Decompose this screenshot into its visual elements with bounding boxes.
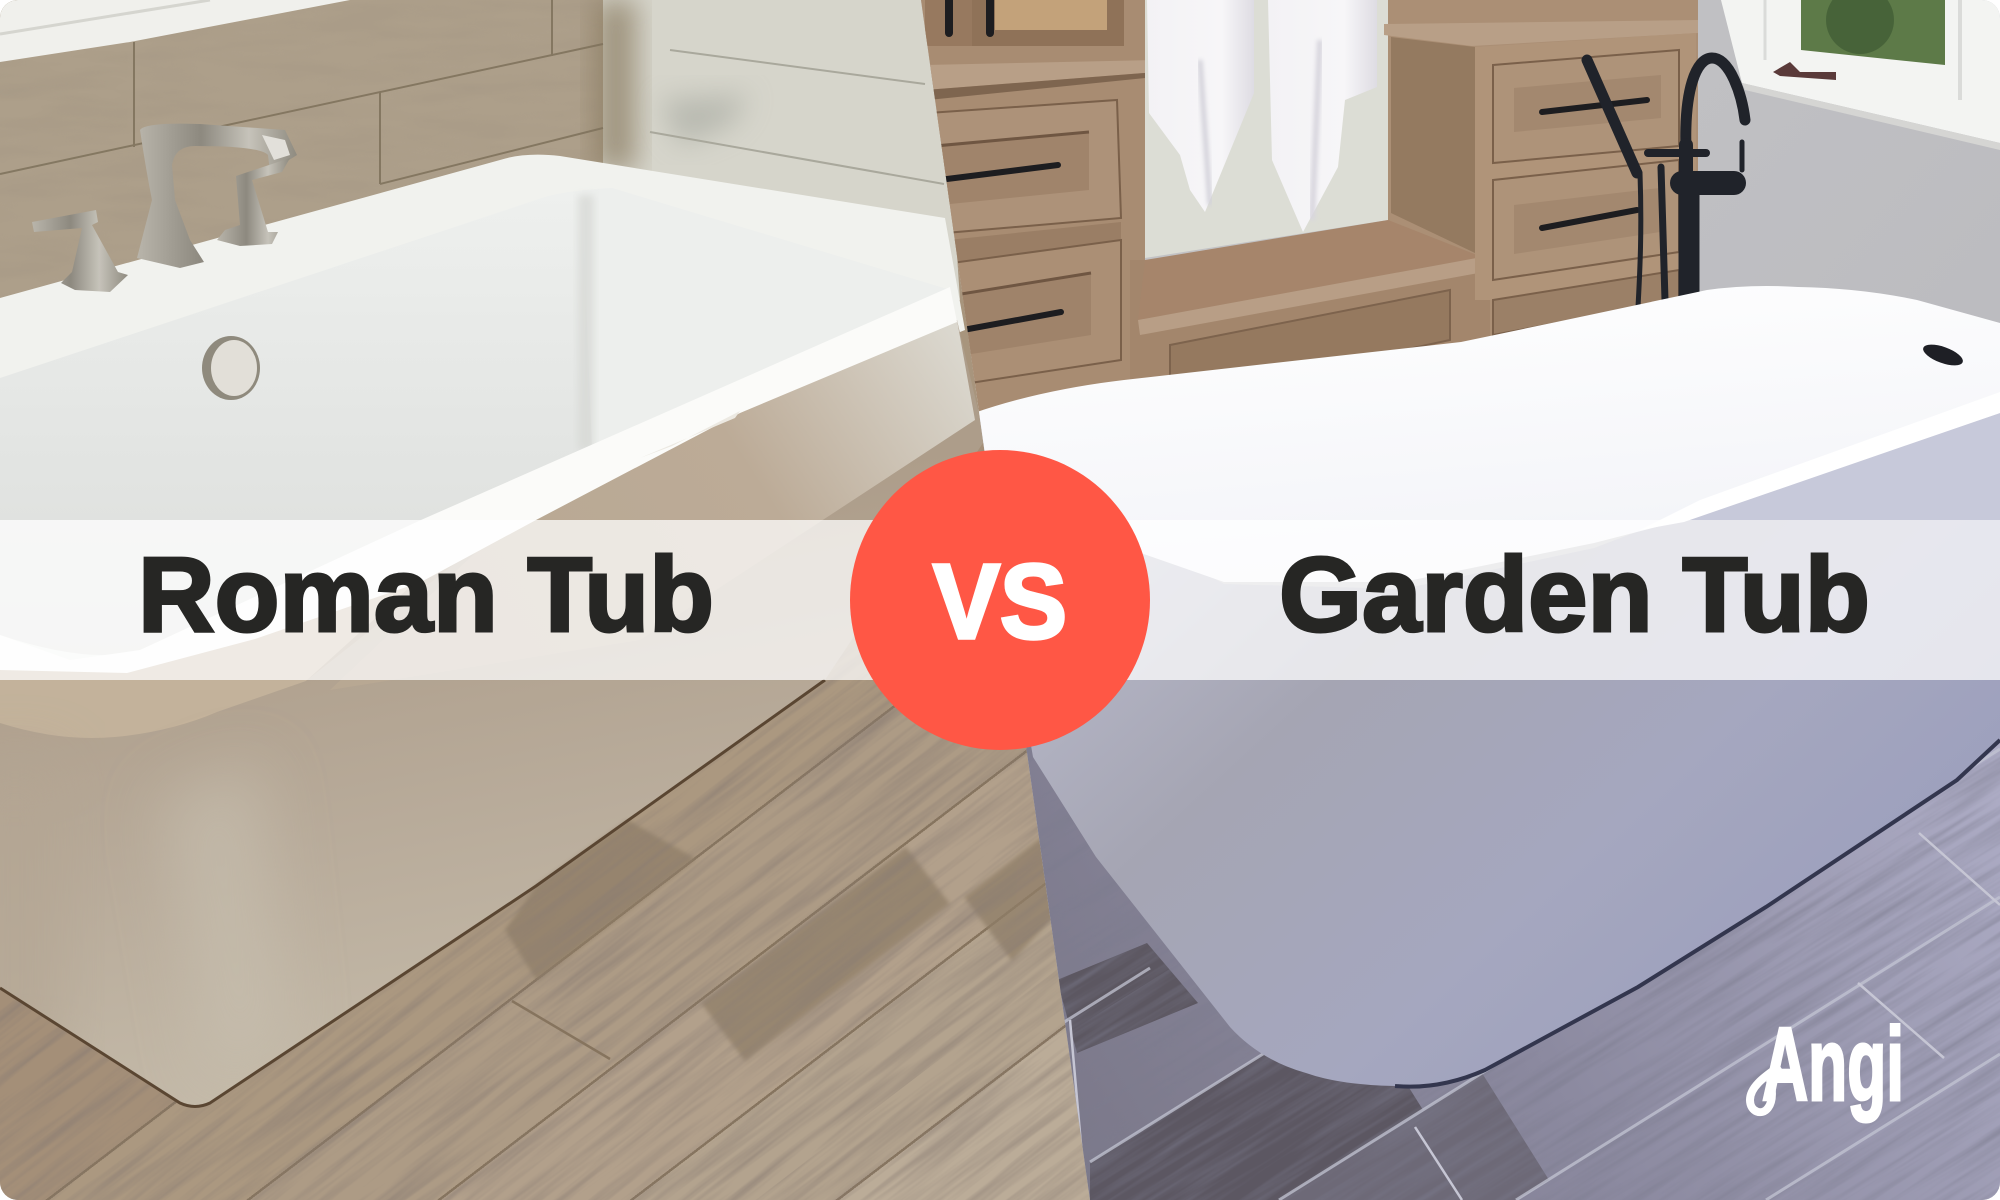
- faucet right handle: [217, 158, 290, 246]
- towels: [1147, 0, 1377, 232]
- tub body: [974, 395, 2000, 1087]
- tub front lip reflection and face: [0, 320, 985, 1106]
- VS badge: [850, 450, 1150, 750]
- Angi logo: Angi: [1762, 1007, 1904, 1123]
- window sill: [0, 0, 350, 62]
- panel: Roman tub photo: [0, 0, 1100, 1200]
- right cabinet tower: [1384, 20, 1698, 335]
- panel: Garden tub photo: [900, 0, 2000, 1200]
- wood plank floor: [0, 440, 1100, 1200]
- cabinet handles: [939, 0, 1647, 330]
- tub interior and rim: [974, 286, 2000, 582]
- heading: Garden Tub: Garden Tub: [1279, 536, 1870, 654]
- title band: [0, 520, 2000, 680]
- tub rim: [0, 154, 965, 660]
- faucet spout: [137, 124, 297, 268]
- tub overflow drain: [1923, 344, 1963, 366]
- floor-standing faucet: [1587, 58, 1745, 307]
- bench: [1138, 220, 1475, 375]
- heading: Roman Tub: Roman Tub: [138, 536, 714, 654]
- tub interior: [0, 306, 582, 520]
- VS badge: VS: [933, 543, 1067, 661]
- Angi logo: [1746, 1023, 1900, 1124]
- tiled wall behind tub: [0, 0, 960, 320]
- cabinetry: [900, 0, 1698, 430]
- upper cabinet doors: [925, 0, 1124, 46]
- faucet left handle: [32, 210, 128, 292]
- window: [1721, 0, 2000, 150]
- left drawers: [928, 100, 1121, 383]
- patterned floor: [1026, 743, 2000, 1200]
- niche wall: [1145, 0, 1388, 258]
- overflow drain: [202, 336, 260, 400]
